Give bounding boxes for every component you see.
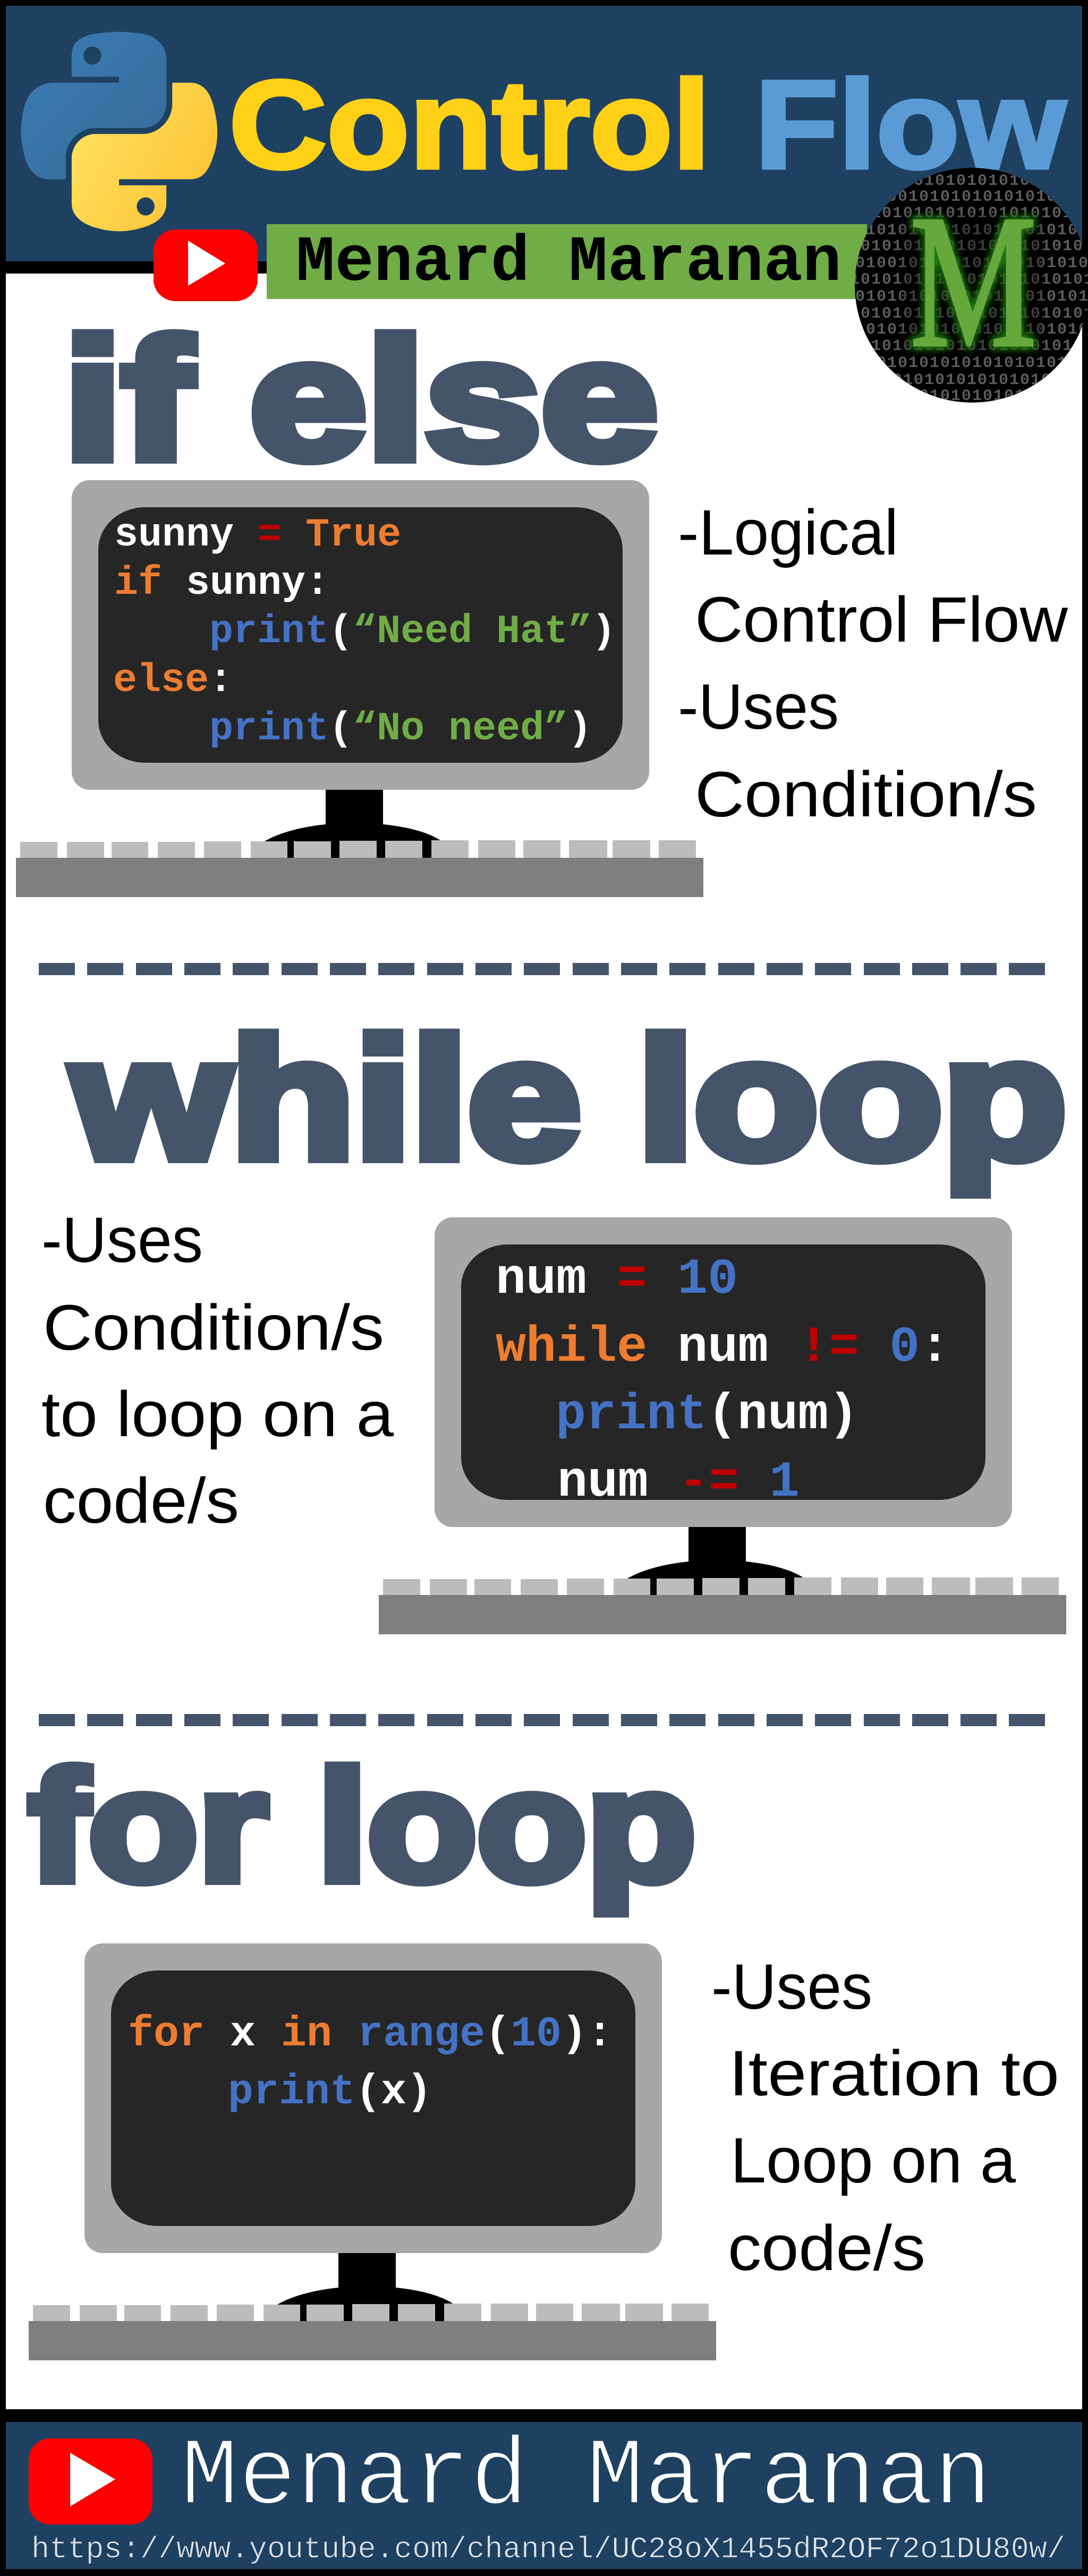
icon: python logo: [21, 32, 217, 231]
channel url: https://www.youtube.com/channel/UC28oX1455dR2OF72o1DU80w/: [31, 2533, 1065, 2567]
code: if else example: if sunny:: [114, 561, 329, 606]
monitor: while loop code: [379, 1217, 1066, 1634]
divider: [39, 963, 1045, 975]
icon: youtube play button: [154, 229, 258, 301]
icon: binary M avatar: M: [910, 176, 1036, 387]
code: for loop example: [128, 2010, 613, 2117]
divider: [39, 1714, 1045, 1726]
code: if else example: [113, 513, 616, 752]
text: while loop description: to loop on a: [41, 1378, 394, 1450]
title: Flow: Flow: [755, 55, 1067, 195]
text: while loop description: code/s: [43, 1464, 239, 1537]
text: while loop description: [41, 1204, 394, 1537]
icon: binary M avatar: [850, 168, 1088, 405]
code: for loop example: print(x): [228, 2068, 432, 2117]
text: if else description: -Uses: [678, 670, 839, 743]
text: for loop description: Loop on a: [730, 2124, 1016, 2196]
heading: while loop: while loop: [69, 1004, 1067, 1195]
code: if else example: print(“No need”): [209, 706, 592, 752]
channel name bar: Menard Maranan: [296, 226, 842, 300]
code: while loop example: print(num): [556, 1386, 858, 1444]
text: if else description: Condition/s: [695, 758, 1037, 830]
text: for loop description: -Uses: [711, 1950, 872, 2023]
channel name: Menard Maranan: [181, 2424, 992, 2532]
code: while loop example: num -= 1: [557, 1454, 800, 1511]
text: while loop description: -Uses: [41, 1204, 203, 1276]
footer banner: [6, 2422, 1082, 2569]
heading: for loop: for loop: [29, 1738, 696, 1915]
text: if else description: [678, 496, 1068, 830]
code: if else example: sunny = True: [114, 513, 401, 558]
text: if else description: -Logical: [678, 496, 898, 568]
icon: youtube play button: [29, 2438, 152, 2524]
code: while loop example: num = 10: [496, 1251, 738, 1308]
code: if else example: else:: [113, 658, 233, 703]
heading: if else: if else: [64, 304, 658, 495]
text: for loop description: [711, 1950, 1059, 2284]
code: if else example: print(“Need Hat”): [209, 609, 616, 654]
code: while loop example: [496, 1251, 950, 1511]
monitor: for loop code: [29, 1943, 716, 2360]
header banner: [6, 6, 1082, 261]
title: Control: Control: [229, 55, 710, 195]
monitor: if else code: [16, 480, 703, 897]
text: for loop description: code/s: [728, 2212, 925, 2284]
code: while loop example: while num != 0:: [496, 1319, 950, 1376]
text: if else description: Control Flow: [695, 583, 1068, 655]
text: for loop description: Iteration to: [729, 2037, 1059, 2109]
code: for loop example: for x in range(10):: [128, 2010, 613, 2059]
text: while loop description: Condition/s: [43, 1291, 384, 1363]
icon: binary M avatar: M: [910, 176, 1036, 387]
